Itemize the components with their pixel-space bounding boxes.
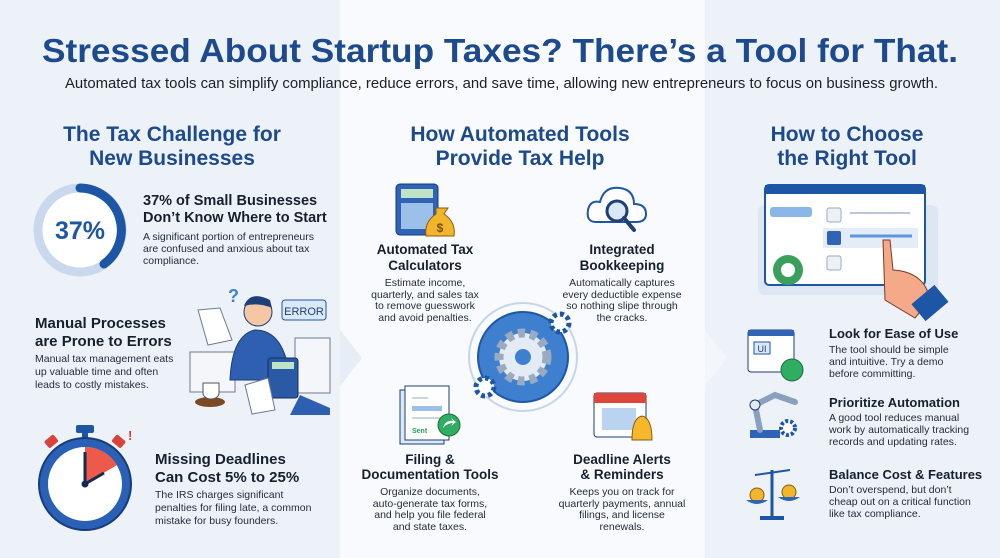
text: filing tools: and state taxes.	[393, 521, 467, 533]
icon: stressed person illustration: ?	[228, 286, 239, 306]
panel: tax challenge	[35, 123, 330, 530]
icon: stopwatch	[39, 425, 132, 530]
title: Stressed About Startup Taxes? There’s a Tool for That.	[42, 32, 958, 69]
heading: choose tool: How to Choose	[771, 123, 923, 146]
subtitle: Automated tax tools can simplify compliance, reduce errors, and save time, allowing new entrepreneurs to focus on business growth.	[65, 75, 938, 92]
chart: 37% donut	[38, 188, 122, 272]
icon: stopwatch: !	[128, 428, 132, 443]
panel: how tools help	[362, 123, 685, 533]
icon: central gears	[469, 303, 577, 411]
text: tax calculators: to remove guesswork	[375, 300, 476, 312]
text: tax calculators: Estimate income,	[385, 277, 465, 289]
text: prioritize automation	[828, 395, 969, 448]
text: bookkeeping: every deductible expense	[562, 289, 682, 301]
icon: stressed person illustration: ERROR	[284, 306, 324, 318]
text: manual processes: are Prone to Errors	[35, 333, 172, 350]
text: 37%: A significant portion of entrepreneurs	[143, 231, 314, 243]
text: deadline alerts: Keeps you on track for	[569, 486, 675, 498]
heading: tax challenge: The Tax Challenge for	[63, 123, 281, 146]
text: tax calculators: Automated Tax	[377, 242, 474, 257]
text: manual processes: leads to costly mistakes.	[35, 379, 149, 391]
text: 37%: 37% of Small Businesses	[143, 193, 317, 209]
text: ease of use: The tool should be simple	[829, 344, 949, 356]
text: bookkeeping	[562, 242, 682, 324]
text: bookkeeping: Bookkeeping	[580, 258, 664, 273]
text: tax calculators: Calculators	[388, 258, 462, 273]
text: ease of use: Look for Ease of Use	[829, 326, 958, 341]
text: deadline alerts: filings, and license	[579, 509, 665, 521]
text: ease of use	[829, 326, 958, 380]
text: filing tools: and help you file federal	[374, 509, 486, 521]
text: bookkeeping: the cracks.	[597, 312, 647, 324]
text: 37%: are confused and anxious about tax	[143, 243, 310, 255]
text: balance cost: cheap out on a critical function	[829, 496, 971, 508]
text: balance cost: Don’t overspend, but don’t	[829, 484, 952, 496]
text: prioritize automation: Prioritize Automation	[829, 395, 960, 410]
icon: balance scale	[746, 470, 800, 520]
icon: robot arm	[750, 395, 795, 438]
text: deadline alerts	[559, 452, 685, 533]
text: 37%: Don’t Know Where to Start	[143, 210, 327, 226]
text: bookkeeping: Integrated	[589, 242, 655, 257]
text: missing deadlines: Can Cost 5% to 25%	[155, 469, 299, 486]
icon: stressed person illustration	[190, 286, 330, 415]
text: manual processes	[35, 315, 173, 391]
text: missing deadlines: mistake for busy founders.	[155, 515, 278, 527]
text: deadline alerts: & Reminders	[580, 467, 664, 482]
text: missing deadlines: penalties for filing late, a common	[155, 502, 312, 514]
text: tax calculators: and avoid penalties.	[378, 312, 472, 324]
text: deadline alerts: quarterly payments, annual	[559, 498, 685, 510]
text: ease of use: and intuitive. Try a demo	[829, 356, 944, 368]
text: bookkeeping: Automatically captures	[569, 277, 675, 289]
icon: calculator with money bag	[396, 184, 454, 236]
text: manual processes: Manual tax management eats	[35, 353, 173, 365]
text: manual processes: Manual Processes	[35, 315, 166, 332]
text: filing tools: Filing &	[405, 452, 455, 467]
text: balance cost: Balance Cost & Features	[829, 467, 982, 482]
text: filing tools: Documentation Tools	[362, 467, 498, 482]
icon: calendar bell	[594, 393, 652, 440]
text: prioritize automation: records and updating rates.	[829, 436, 957, 448]
text: deadline alerts: renewals.	[600, 521, 644, 533]
icon: browser with hand	[758, 185, 949, 321]
heading: how tools help: Provide Tax Help	[436, 147, 604, 170]
icon: cloud magnifier	[588, 188, 646, 230]
text: balance cost: like tax compliance.	[829, 508, 921, 520]
icon: calculator with money bag: $	[437, 221, 444, 235]
text: filing tools	[362, 452, 498, 533]
text: ease of use: before committing.	[829, 368, 915, 380]
text: manual processes: up valuable time and often	[35, 366, 158, 378]
text: tax calculators: quarterly, and sales tax	[371, 289, 480, 301]
icon: UI thumbs up: UI	[758, 344, 766, 354]
icon: UI thumbs up	[748, 330, 803, 381]
text: balance cost	[829, 467, 982, 520]
icon: sent document: Sent	[412, 428, 428, 435]
heading: choose tool: the Right Tool	[777, 147, 917, 170]
text: prioritize automation: work by automatically tracking	[828, 424, 969, 436]
text: filing tools: auto-generate tax forms,	[373, 498, 487, 510]
text: missing deadlines	[155, 451, 312, 527]
text: missing deadlines: The IRS charges significant	[155, 489, 283, 501]
text: filing tools: Organize documents,	[380, 486, 480, 498]
text: missing deadlines: Missing Deadlines	[155, 451, 286, 468]
icon: sent document	[400, 386, 460, 444]
heading: how tools help: How Automated Tools	[410, 123, 630, 146]
text: 37%: compliance.	[143, 255, 199, 267]
heading: tax challenge: New Businesses	[89, 147, 255, 170]
panel: choose the right tool	[746, 123, 982, 520]
text: 37%	[143, 193, 327, 267]
chart: 37% donut: 37%	[55, 217, 105, 245]
text: prioritize automation: A good tool reduces manual	[829, 412, 959, 424]
text: deadline alerts: Deadline Alerts	[573, 452, 671, 467]
text: bookkeeping: so nothing slipe through	[566, 300, 678, 312]
text: tax calculators	[371, 242, 480, 324]
